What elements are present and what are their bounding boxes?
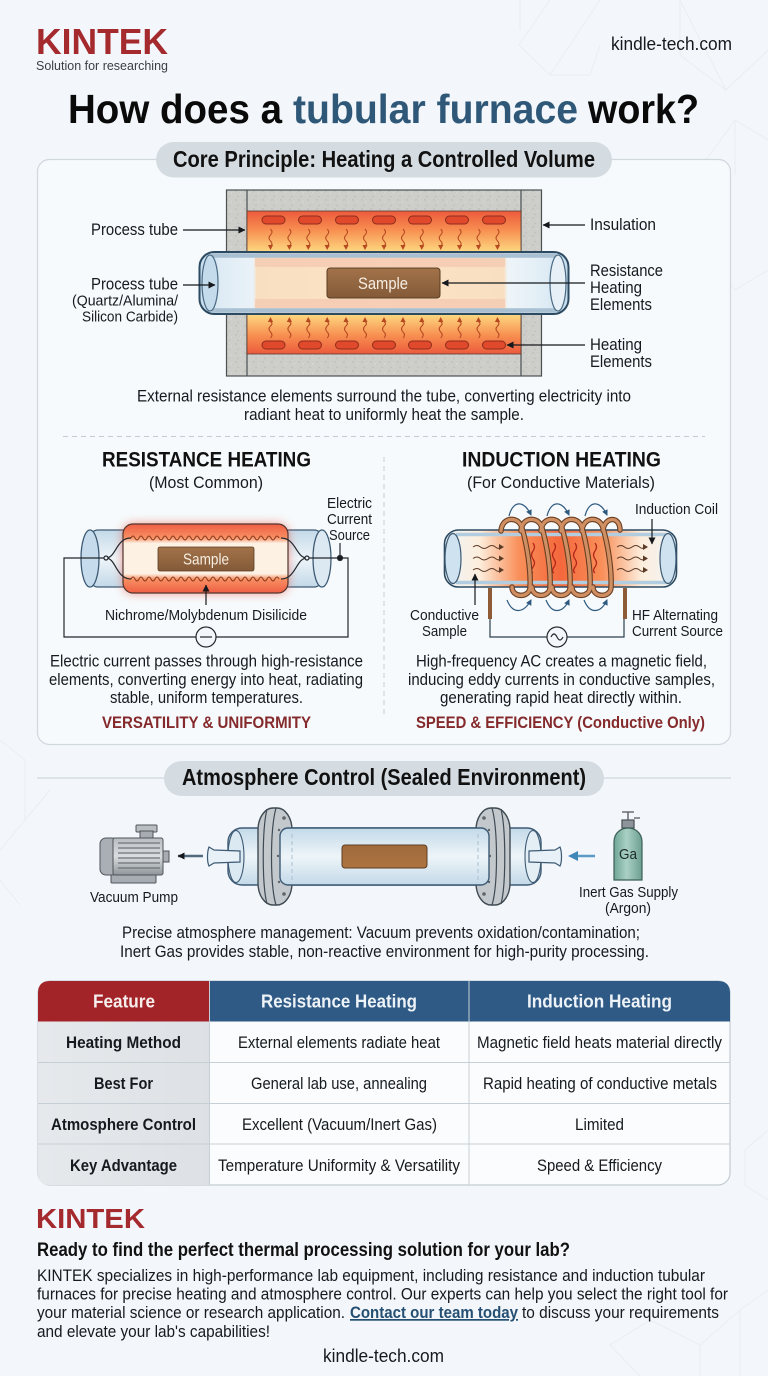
atmosphere caption: Inert Gas provides stable, non-reactive environment for high-purity processing. [120, 942, 649, 961]
heading: induction heating [462, 448, 661, 492]
label: insulation [543, 215, 656, 234]
resistance description: elements, converting energy into heat, radiating [49, 670, 363, 689]
eddy currents [532, 543, 596, 573]
header: induction heating: Induction Heating [527, 992, 672, 1012]
label: conductive sample: Conductive [410, 607, 479, 624]
label: vacuum pump: Vacuum Pump [90, 889, 178, 906]
row: key advantage: Speed & Efficiency [537, 1156, 662, 1175]
header: feature [38, 981, 210, 1022]
title: work? [587, 86, 699, 132]
footer body text: to discuss your requirements [522, 1303, 719, 1322]
atmosphere caption [120, 923, 649, 961]
row: key advantage: Key Advantage [70, 1156, 177, 1175]
website link top: kindle-tech.com [611, 34, 732, 54]
row: key advantage: Temperature Uniformity & Versatility [218, 1156, 460, 1175]
label: process tube materials [72, 274, 215, 326]
label: electric current source [327, 495, 373, 544]
right flange [476, 808, 510, 905]
row: atmosphere control: Limited [575, 1115, 624, 1134]
section: atmosphere control [90, 761, 678, 961]
sample block: Sample [183, 552, 229, 568]
heading: resistance heating: (Most Common) [149, 473, 263, 492]
heading pill: core principle [156, 142, 612, 178]
column: resistance heating [49, 448, 373, 732]
glass tube with heat [444, 530, 676, 587]
row: best for: Rapid heating of conductive metals [483, 1074, 717, 1093]
left flange [258, 808, 292, 905]
label: heating elements [507, 335, 652, 371]
logo: KINTEK header: KINTEK [36, 21, 168, 62]
sample block [158, 547, 254, 571]
core principle caption: External resistance elements surround the tube, converting electricity into [137, 386, 631, 406]
outer tube ends and nozzles [208, 828, 562, 885]
label: heating elements: Heating [590, 335, 642, 354]
header: resistance heating [210, 981, 469, 1022]
sample block [342, 845, 427, 868]
feature column shading [38, 1022, 210, 1185]
row: best for [94, 1074, 717, 1093]
footer body text: Contact our team today [350, 1303, 518, 1322]
header: feature: Feature [93, 992, 155, 1012]
row: best for: Best For [94, 1074, 153, 1093]
label: conductive sample: Sample [422, 623, 467, 640]
induction description: inducing eddy currents in conductive samples, [408, 670, 715, 689]
label: process tube materials: Process tube [91, 274, 178, 294]
diagram: resistance circuit [64, 495, 373, 647]
header: induction heating [469, 981, 730, 1022]
footer body text: your material science or research application. [37, 1303, 345, 1322]
insulation block [226, 190, 542, 376]
heading: resistance heating [102, 448, 311, 492]
label: heating elements: Elements [590, 352, 652, 371]
diagram: sealed tube [178, 808, 595, 905]
label: inert gas supply: Inert Gas Supply [579, 884, 678, 901]
footer website: kindle-tech.com [323, 1346, 444, 1366]
icon: vacuum pump [100, 825, 169, 883]
sample block: Sample [358, 274, 408, 293]
heading pill: atmosphere control [164, 761, 604, 796]
AC source circuit [490, 588, 625, 647]
title: tubular furnace [293, 86, 578, 132]
induction description [408, 652, 715, 707]
title [68, 86, 699, 132]
label: inert gas supply [579, 884, 678, 917]
title: How does a [68, 86, 283, 132]
arrow: from gas supply [568, 851, 595, 861]
core principle caption: radiant heat to uniformly heat the sample. [244, 405, 524, 424]
induction takeaway: SPEED & EFFICIENCY (Conductive Only) [416, 713, 705, 732]
row: heating method: Magnetic field heats material directly [477, 1033, 722, 1052]
label: electric current source: Current [327, 511, 373, 528]
row: best for: General lab use, annealing [251, 1074, 427, 1093]
process tube [200, 252, 568, 314]
label: inert gas supply: (Argon) [605, 900, 651, 917]
copper coil [501, 519, 620, 595]
footer body text [37, 1266, 728, 1341]
label: HF alternating current source: Current Source [632, 623, 723, 640]
label: resistance heating elements: Heating [590, 278, 642, 297]
row: heating method: Heating Method [66, 1033, 181, 1052]
heading: resistance heating: RESISTANCE HEATING [102, 448, 311, 472]
label: resistance heating elements [442, 261, 663, 314]
footer body text: and elevate your lab's capabilities! [37, 1322, 270, 1341]
diagram: induction coil [410, 501, 723, 647]
sample block [327, 268, 440, 298]
induction description: generating rapid heat directly within. [440, 688, 682, 707]
upper hot zone [247, 211, 521, 252]
label: conductive sample [410, 574, 479, 640]
diagram: furnace cross section [72, 190, 663, 376]
footer body text: KINTEK specializes in high-performance lab equipment, including resistance and induction tubular [37, 1266, 705, 1285]
arrow: to vacuum pump [178, 855, 203, 857]
lower hot zone [247, 314, 521, 354]
panel: heating methods [38, 142, 730, 744]
label: resistance heating elements: Elements [590, 295, 652, 314]
footer heading: Ready to find the perfect thermal processing solution for your lab? [37, 1240, 570, 1261]
resistance takeaway: VERSATILITY & UNIFORMITY [102, 713, 312, 732]
wiring [64, 538, 348, 647]
heat flow arrows [473, 544, 648, 573]
row: atmosphere control: Atmosphere Control [51, 1115, 196, 1134]
atmosphere caption: Precise atmosphere management: Vacuum prevents oxidation/contamination; [122, 923, 640, 942]
core principle caption [137, 386, 631, 424]
label: induction coil: Induction Coil [635, 501, 718, 518]
label: electric current source: Electric [327, 495, 372, 512]
label: induction coil [635, 501, 718, 544]
row: key advantage [70, 1156, 662, 1175]
resistance description: stable, uniform temperatures. [110, 688, 303, 707]
heading: induction heating: INDUCTION HEATING [462, 448, 661, 472]
glowing heater sleeve [123, 524, 288, 593]
footer logo: KINTEK [36, 1203, 145, 1234]
heading: induction heating: (For Conductive Materials) [467, 473, 655, 492]
inner tube [280, 828, 489, 885]
resistance description: Electric current passes through high-resistance [50, 652, 363, 670]
glass tube [81, 530, 331, 587]
label: HF alternating current source: HF Alternating [632, 607, 718, 624]
header: resistance heating: Resistance Heating [261, 992, 417, 1012]
label: process tube materials: Silicon Carbide) [82, 308, 178, 326]
icon: gas cylinder [614, 812, 642, 880]
table body [38, 981, 730, 1185]
label: nichrome element: Nichrome/Molybdenum Disilicide [105, 607, 307, 624]
icon: gas cylinder: Ga [619, 846, 638, 863]
magnetic field arrows [507, 504, 607, 611]
resistance description [49, 652, 363, 707]
logo: KINTEK header: Solution for researching [36, 58, 168, 73]
row: atmosphere control [51, 1115, 624, 1134]
column: induction heating [408, 448, 723, 732]
label: HF alternating current source [632, 607, 723, 640]
heading pill: core principle: Core Principle: Heating a Controlled Volume [173, 146, 595, 172]
label: process tube materials: (Quartz/Alumina/ [72, 292, 179, 310]
comparison table [38, 981, 730, 1185]
label: process tube: Process tube [91, 220, 178, 239]
row: atmosphere control: Excellent (Vacuum/Inert Gas) [242, 1115, 437, 1134]
row: heating method: External elements radiate heat [238, 1033, 440, 1052]
heading pill: atmosphere control: Atmosphere Control (Sealed Environment) [182, 764, 586, 790]
row: heating method [66, 1033, 722, 1052]
label: electric current source: Source [329, 527, 370, 544]
label: resistance heating elements: Resistance [590, 261, 663, 280]
induction description: High-frequency AC creates a magnetic field, [416, 652, 707, 670]
label: insulation: Insulation [590, 215, 656, 234]
